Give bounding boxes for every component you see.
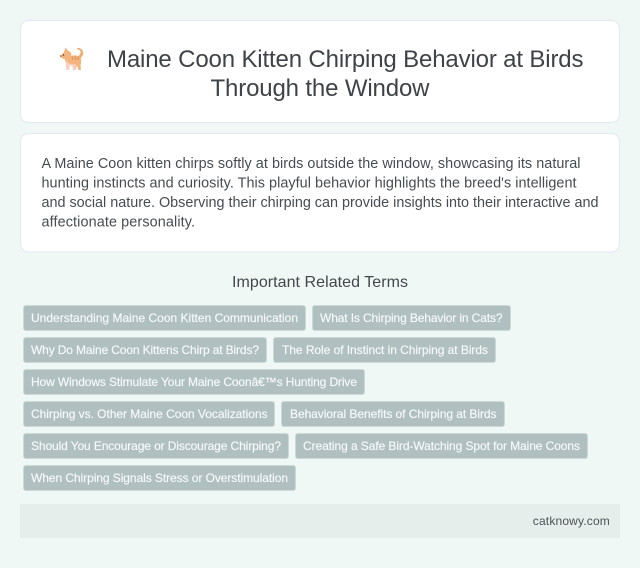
footer source text: catknowy.com	[533, 514, 610, 528]
tag 4: The Role of Instinct in Chirping at Birds	[282, 343, 488, 357]
title: Through the Window	[210, 75, 430, 102]
tag 3	[24, 338, 266, 362]
panel: related term tags	[24, 306, 588, 490]
text block: description: hunting instincts and curiosity. This playful behavior highlights the breed's intelligent	[42, 176, 576, 192]
panel: description	[20, 134, 620, 252]
tag 4	[274, 338, 496, 362]
tag 1	[24, 306, 306, 330]
tag 1: Understanding Maine Coon Kitten Communication	[31, 311, 298, 325]
text block: description: affectionate personality.	[42, 214, 195, 230]
tag 8: Should You Encourage or Discourage Chirping?	[31, 439, 281, 453]
title: Maine Coon Kitten Chirping Behavior at Birds	[107, 46, 584, 73]
footer	[20, 504, 620, 538]
panel: title card	[20, 20, 620, 122]
tag 7: Behavioral Benefits of Chirping at Birds	[290, 407, 496, 421]
tag 9	[296, 434, 588, 458]
tag 3: Why Do Maine Coon Kittens Chirp at Birds?	[31, 343, 259, 357]
text block: description	[42, 156, 598, 230]
tag 10: When Chirping Signals Stress or Overstimulation	[31, 471, 288, 485]
tag 5	[24, 370, 364, 394]
tag 5: How Windows Stimulate Your Maine Coonâ€™s Hunting Drive	[31, 375, 357, 389]
heading: related terms: Important Related Terms	[232, 274, 408, 291]
tag 7	[282, 402, 504, 426]
tag 6: Chirping vs. Other Maine Coon Vocalizations	[31, 407, 268, 421]
text block: description: A Maine Coon kitten chirps softly at birds outside the window, showcasing its natural	[42, 156, 580, 172]
icon: orange cat	[60, 48, 83, 70]
tag 8	[24, 434, 288, 458]
title	[107, 46, 584, 102]
tag 2	[312, 306, 510, 330]
tag 6	[24, 402, 274, 426]
tag 2: What Is Chirping Behavior in Cats?	[320, 311, 503, 325]
tag 10	[24, 466, 296, 490]
tag 9: Creating a Safe Bird-Watching Spot for Maine Coons	[303, 439, 580, 453]
text block: description: and social nature. Observing their chirping can provide insights into their interactive and	[42, 195, 598, 211]
